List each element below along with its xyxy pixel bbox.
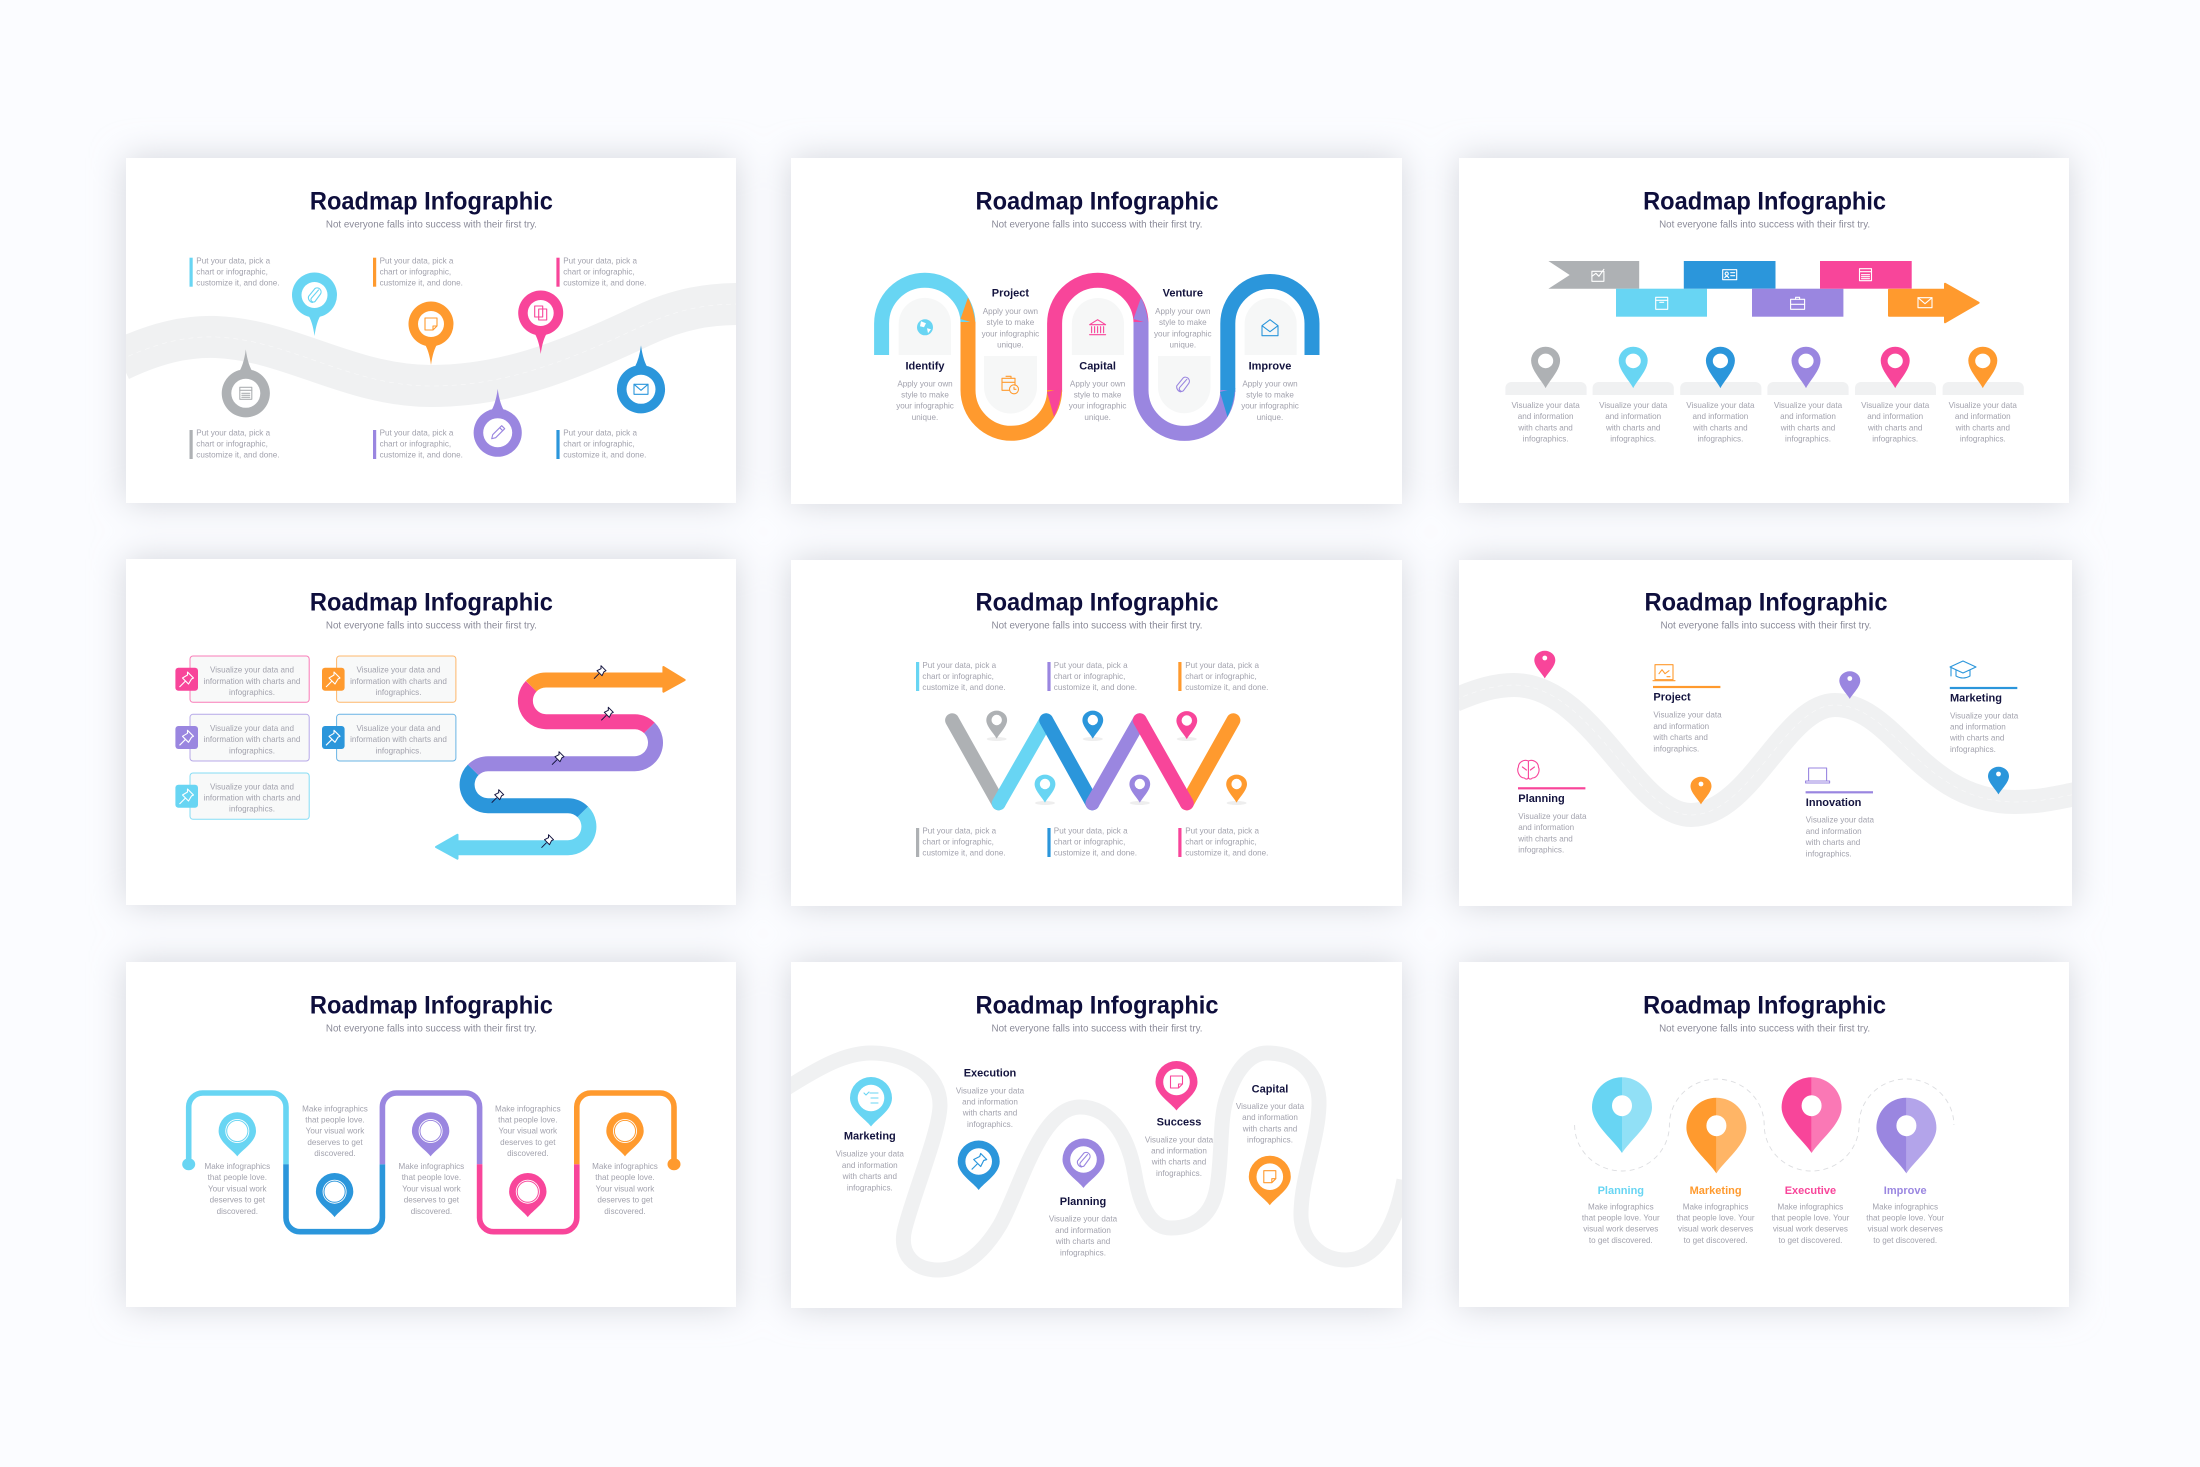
- card: cyan: Visualize your data and: [210, 782, 294, 791]
- text block: chart or infographic,: [922, 672, 994, 681]
- step: Identify: unique.: [912, 413, 938, 422]
- card: purple: information with charts and: [204, 735, 300, 744]
- card: blue: infographics.: [376, 746, 421, 755]
- title: Roadmap Infographic: [1643, 187, 1886, 215]
- item: Improve: [1866, 1185, 1944, 1245]
- card: pink: infographics.: [229, 688, 275, 697]
- step: Capital: style to make: [1074, 390, 1122, 400]
- step: Execution: Execution: [964, 1067, 1017, 1079]
- text block: chart or infographic,: [1185, 672, 1257, 681]
- text block: Put your data, pick a: [1054, 826, 1128, 835]
- step: Identify: Apply your own: [897, 379, 953, 388]
- wave text: Your visual work: [208, 1184, 268, 1193]
- panel: zigzag W: [791, 560, 1402, 906]
- panel: winding road with milestones: [1455, 560, 2076, 906]
- item: Executive: Executive: [1785, 1185, 1836, 1197]
- step: Improve: [1241, 360, 1299, 422]
- subtitle: Not everyone falls into success with their first try.: [326, 620, 537, 631]
- panel: S-curve arrow with cards: [126, 559, 736, 905]
- pin: note: [408, 302, 454, 365]
- step: Execution: infographics.: [967, 1120, 1013, 1129]
- text block: customize it, and done.: [380, 278, 463, 288]
- item: Marketing: that people love. Your: [1677, 1214, 1755, 1222]
- step: Marketing: Marketing: [844, 1131, 896, 1143]
- milestone: Planning: with charts and: [1517, 834, 1573, 843]
- title: Roadmap Infographic: [976, 991, 1219, 1019]
- step: Capital: [1069, 360, 1126, 422]
- title: Roadmap Infographic: [1643, 991, 1886, 1019]
- card text: Visualize your data: [1774, 401, 1843, 410]
- milestone: Planning: and information: [1518, 823, 1574, 832]
- wave text: deserves to get: [500, 1138, 556, 1147]
- step: Marketing: infographics.: [847, 1183, 893, 1192]
- subtitle: Not everyone falls into success with their first try.: [1659, 219, 1870, 230]
- road pins: [1534, 651, 2009, 804]
- step: Identify: style to make: [901, 390, 949, 400]
- road: [1455, 685, 2076, 815]
- milestone: Innovation: infographics.: [1806, 849, 1852, 858]
- text block: [1047, 661, 1137, 692]
- milestone: Planning: infographics.: [1518, 846, 1564, 855]
- step: Capital: Visualize your data: [1236, 1102, 1305, 1111]
- step: Success: and information: [1151, 1146, 1207, 1156]
- step: Project: unique.: [997, 341, 1024, 350]
- item: Improve: visual work deserves: [1868, 1225, 1943, 1234]
- card: orange: [322, 656, 456, 702]
- text block: chart or infographic,: [1054, 672, 1125, 681]
- pin: Planning: [1062, 1138, 1104, 1188]
- text block: [1178, 661, 1268, 692]
- wave text: Make infographics: [302, 1104, 368, 1113]
- zigzag: [952, 720, 1233, 803]
- title: Roadmap Infographic: [310, 588, 553, 616]
- step: Marketing: and information: [842, 1161, 898, 1170]
- item: Improve: that people love. Your: [1866, 1214, 1944, 1222]
- step: Capital: infographics.: [1247, 1136, 1293, 1145]
- wave text: Your visual work: [498, 1127, 558, 1136]
- card text: Visualize your data: [1949, 401, 2017, 410]
- step: Venture: your infographic: [1154, 329, 1212, 338]
- item: Marketing: [1677, 1185, 1755, 1245]
- text block: chart or infographic,: [380, 267, 451, 276]
- step: Success: [1145, 1116, 1214, 1178]
- card: orange: information with charts and: [350, 677, 447, 686]
- wave text: that people love.: [498, 1116, 558, 1124]
- step: Venture: Venture: [1163, 288, 1203, 300]
- step: Success: Visualize your data: [1145, 1135, 1214, 1144]
- pin: paperclip: [292, 272, 337, 336]
- serpentine path: [882, 280, 1312, 433]
- card text: infographics.: [1610, 435, 1656, 444]
- card headers: [1505, 382, 2024, 395]
- text block: Put your data, pick a: [1185, 661, 1259, 670]
- card text: with charts and: [1955, 423, 2010, 432]
- pin: pen: [474, 389, 522, 457]
- card text: with charts and: [1605, 423, 1660, 432]
- pins: [219, 1112, 644, 1217]
- item: Executive: visual work deserves: [1773, 1225, 1848, 1234]
- card text: Visualize your data: [1861, 401, 1930, 410]
- wave text: discovered.: [217, 1207, 258, 1216]
- item: Planning: visual work deserves: [1583, 1225, 1658, 1234]
- step: Planning: with charts and: [1055, 1237, 1110, 1246]
- step: Success: infographics.: [1156, 1169, 1202, 1178]
- item: Planning: that people love. Your: [1582, 1214, 1660, 1222]
- item: Executive: [1771, 1185, 1850, 1245]
- step: Marketing: [836, 1131, 904, 1192]
- icon: paperclip: [1177, 377, 1189, 392]
- step: Capital: Capital: [1079, 360, 1116, 372]
- item: Marketing: visual work deserves: [1678, 1225, 1753, 1234]
- wave text: discovered.: [507, 1149, 548, 1158]
- wave text: that people love.: [305, 1116, 365, 1124]
- icon: open envelope: [1262, 320, 1278, 336]
- wave text: discovered.: [411, 1207, 452, 1216]
- step: Planning: infographics.: [1060, 1248, 1106, 1257]
- card text: infographics.: [1697, 435, 1743, 444]
- item: Executive: to get discovered.: [1778, 1236, 1842, 1245]
- step: Project: Apply your own: [983, 307, 1038, 316]
- S-curve arrow: [436, 667, 685, 859]
- item: Executive: Make infographics: [1778, 1202, 1843, 1211]
- milestone: Project: [1652, 665, 1722, 753]
- card text: infographics.: [1960, 435, 2006, 444]
- item: Marketing: Marketing: [1690, 1185, 1742, 1197]
- step: Success: Success: [1157, 1116, 1201, 1128]
- card: blue: [322, 714, 456, 761]
- card text: infographics.: [1523, 435, 1569, 444]
- text block: chart or infographic,: [922, 837, 994, 846]
- wave text: Make infographics: [592, 1162, 658, 1171]
- step: Planning: Visualize your data: [1049, 1215, 1118, 1224]
- wave text: that people love.: [402, 1173, 461, 1182]
- text block: chart or infographic,: [563, 267, 635, 276]
- card: pink: information with charts and: [204, 677, 300, 686]
- card text: and information: [1867, 412, 1923, 421]
- pin: Success: [1156, 1061, 1198, 1111]
- wave text: discovered.: [604, 1207, 646, 1216]
- step: Project: your infographic: [982, 329, 1039, 338]
- milestone: Project: Visualize your data: [1653, 711, 1722, 720]
- milestone: Marketing: with charts and: [1949, 734, 2004, 743]
- panel: square wave: [126, 962, 736, 1307]
- text block: Put your data, pick a: [922, 826, 997, 835]
- wave text: Your visual work: [306, 1127, 365, 1136]
- card text: with charts and: [1780, 423, 1835, 432]
- step: Project: style to make: [987, 318, 1035, 327]
- pin: Marketing: [850, 1077, 892, 1127]
- panel: split pins: [1459, 962, 2069, 1307]
- step: Improve: style to make: [1246, 390, 1294, 400]
- item: Executive: that people love. Your: [1771, 1214, 1850, 1222]
- subtitle: Not everyone falls into success with their first try.: [992, 620, 1202, 631]
- text block: customize it, and done.: [922, 848, 1006, 858]
- card: purple: [175, 714, 309, 761]
- subtitle: Not everyone falls into success with their first try.: [992, 219, 1202, 230]
- pin: copy: [518, 290, 563, 354]
- pin: calendar: [222, 349, 270, 417]
- milestone: Project: infographics.: [1653, 744, 1699, 753]
- card text: and information: [1518, 412, 1573, 421]
- item: Marketing: Make infographics: [1683, 1202, 1748, 1211]
- step: Planning: [1049, 1196, 1118, 1257]
- subtitle: Not everyone falls into success with their first try.: [1660, 620, 1872, 631]
- step: Venture: [1154, 288, 1212, 350]
- road: [120, 304, 740, 386]
- text block: customize it, and done.: [922, 683, 1006, 692]
- pin: mail: [617, 345, 665, 413]
- subtitle: Not everyone falls into success with their first try.: [1659, 1023, 1870, 1034]
- pin: pink: [1782, 1077, 1842, 1153]
- card text: and information: [1605, 412, 1661, 421]
- icon: bank: [1090, 320, 1106, 335]
- text block: customize it, and done.: [1185, 683, 1268, 692]
- text block: [190, 428, 280, 460]
- card text: and information: [1693, 412, 1748, 421]
- ribbon icons: [1592, 269, 1932, 309]
- step: Improve: Apply your own: [1242, 379, 1298, 388]
- milestone: Marketing: and information: [1950, 722, 2006, 732]
- wave text: discovered.: [314, 1149, 356, 1158]
- step: Marketing: with charts and: [842, 1172, 897, 1181]
- step: Capital: with charts and: [1242, 1124, 1297, 1133]
- text block: chart or infographic,: [563, 440, 635, 449]
- text block: Put your data, pick a: [196, 428, 271, 438]
- wave text: Make infographics: [204, 1162, 270, 1171]
- subtitle: Not everyone falls into success with their first try.: [326, 219, 537, 230]
- text block: chart or infographic,: [196, 440, 268, 449]
- milestone: Project: and information: [1653, 722, 1709, 731]
- wave text: deserves to get: [597, 1196, 653, 1205]
- inner tiles: [899, 298, 1297, 414]
- wave text: Your visual work: [402, 1184, 462, 1193]
- card: cyan: information with charts and: [204, 794, 300, 802]
- title: Roadmap Infographic: [310, 991, 553, 1019]
- step: Capital: Capital: [1252, 1083, 1288, 1095]
- push pins: [492, 666, 613, 848]
- milestone: Innovation: with charts and: [1805, 838, 1860, 847]
- milestone: Innovation: and information: [1806, 827, 1862, 836]
- milestone: Planning: [1517, 760, 1587, 855]
- text block: Put your data, pick a: [1054, 661, 1128, 670]
- card text: with charts and: [1692, 423, 1748, 432]
- card text: Visualize your data: [1511, 401, 1580, 410]
- card: blue: Visualize your data and: [356, 724, 440, 733]
- text block: [1178, 826, 1268, 858]
- step: Marketing: Visualize your data: [836, 1150, 904, 1159]
- wave text: Your visual work: [596, 1184, 655, 1193]
- item: Planning: Make infographics: [1588, 1202, 1654, 1211]
- pin: cyan: [1592, 1077, 1652, 1153]
- milestone: Project: with charts and: [1652, 733, 1708, 742]
- title: Roadmap Infographic: [310, 187, 553, 215]
- milestone: Marketing: infographics.: [1950, 745, 1996, 754]
- card: pink: [175, 656, 309, 702]
- card text: Visualize your data: [1686, 401, 1755, 410]
- text block: customize it, and done.: [1185, 848, 1268, 858]
- card text: and information: [1780, 412, 1836, 421]
- step: Execution: and information: [962, 1098, 1018, 1106]
- card text: Visualize your data: [1599, 401, 1668, 410]
- step: Venture: unique.: [1170, 341, 1196, 350]
- wave text: that people love.: [595, 1173, 655, 1182]
- step: Capital: and information: [1242, 1113, 1298, 1122]
- text block: Put your data, pick a: [1185, 826, 1259, 835]
- soft shadows: [126, 158, 2072, 1308]
- text block: customize it, and done.: [563, 278, 646, 288]
- step: Execution: with charts and: [962, 1109, 1017, 1118]
- text block: [556, 428, 646, 460]
- panel: serpentine arcs: [791, 158, 1402, 504]
- title: Roadmap Infographic: [1644, 588, 1888, 616]
- step: Identify: [896, 360, 954, 422]
- step: Project: Project: [992, 288, 1029, 300]
- text block: Put your data, pick a: [563, 256, 637, 265]
- panel: ribbon arrow: [1459, 158, 2069, 503]
- text block: customize it, and done.: [563, 451, 646, 460]
- milestone: Planning: Visualize your data: [1518, 812, 1587, 821]
- text block: [190, 256, 280, 288]
- card: purple: Visualize your data and: [210, 724, 294, 733]
- text block: customize it, and done.: [196, 278, 280, 288]
- panel: road with balloon pins: [120, 158, 740, 503]
- item: Planning: [1582, 1185, 1660, 1245]
- card text: with charts and: [1517, 423, 1573, 432]
- icon: schedule: [1002, 376, 1018, 394]
- text block: Put your data, pick a: [922, 661, 997, 670]
- square wave line: [182, 1093, 680, 1232]
- item: Improve: to get discovered.: [1873, 1236, 1937, 1245]
- text block: Put your data, pick a: [563, 428, 637, 438]
- wave text: deserves to get: [307, 1138, 363, 1147]
- text block: [373, 428, 463, 460]
- item: Improve: Make infographics: [1872, 1202, 1938, 1211]
- milestone: Planning: Planning: [1518, 793, 1565, 805]
- text block: customize it, and done.: [380, 451, 463, 460]
- card: cyan: infographics.: [229, 805, 275, 814]
- milestone: Marketing: [1949, 661, 2019, 754]
- text block: Put your data, pick a: [196, 256, 271, 265]
- card: orange: infographics.: [376, 688, 421, 697]
- step: Venture: Apply your own: [1155, 307, 1210, 316]
- card text: and information: [1955, 412, 2011, 421]
- item: Improve: Improve: [1884, 1185, 1927, 1197]
- text block: customize it, and done.: [1054, 683, 1137, 692]
- wave text: Make infographics: [495, 1104, 561, 1113]
- item: Marketing: to get discovered.: [1684, 1236, 1748, 1245]
- ribbon segments: [1548, 261, 1979, 322]
- text block: Put your data, pick a: [380, 256, 454, 265]
- text block: customize it, and done.: [196, 451, 280, 460]
- step: Capital: your infographic: [1069, 402, 1126, 411]
- panel: meandering road: [785, 962, 1404, 1308]
- pin: Execution: [958, 1140, 1000, 1190]
- text block: chart or infographic,: [380, 440, 451, 449]
- text block: customize it, and done.: [1054, 848, 1137, 858]
- step: Success: with charts and: [1151, 1158, 1206, 1167]
- text block: Put your data, pick a: [380, 428, 454, 438]
- title: Roadmap Infographic: [976, 588, 1219, 616]
- step: Capital: [1236, 1083, 1305, 1145]
- card text: with charts and: [1867, 423, 1922, 432]
- step: Execution: Visualize your data: [956, 1086, 1025, 1095]
- pin: purple: [1876, 1098, 1936, 1173]
- wave text: deserves to get: [404, 1196, 460, 1205]
- milestone: Innovation: [1805, 768, 1875, 858]
- road: [785, 1053, 1404, 1270]
- milestone: Marketing: Marketing: [1950, 693, 2002, 705]
- text block: [373, 256, 463, 288]
- subtitle: Not everyone falls into success with their first try.: [992, 1023, 1202, 1034]
- step: Improve: your infographic: [1241, 402, 1299, 411]
- milestone: Project: Project: [1653, 692, 1691, 704]
- text block: chart or infographic,: [1185, 837, 1257, 846]
- pins: [986, 711, 1247, 805]
- item: Planning: to get discovered.: [1589, 1236, 1653, 1245]
- pin: orange: [1686, 1098, 1746, 1173]
- title: Roadmap Infographic: [976, 187, 1219, 215]
- wave text: deserves to get: [210, 1196, 266, 1205]
- icon: globe: [917, 319, 933, 335]
- text block: chart or infographic,: [1054, 837, 1125, 846]
- step: Venture: style to make: [1159, 318, 1207, 327]
- step: Improve: Improve: [1249, 360, 1291, 372]
- milestone: Marketing: Visualize your data: [1950, 711, 2019, 720]
- milestone: Innovation: Innovation: [1806, 797, 1862, 809]
- subtitle: Not everyone falls into success with their first try.: [326, 1023, 537, 1034]
- map pins: [1531, 347, 1997, 388]
- wave text: that people love.: [208, 1173, 267, 1182]
- step: Execution: [956, 1067, 1025, 1129]
- text block: [556, 256, 646, 288]
- card: pink: Visualize your data and: [210, 666, 294, 675]
- dashed wave: [1575, 1079, 1954, 1171]
- step: Capital: Apply your own: [1070, 379, 1125, 388]
- step: Identify: your infographic: [896, 402, 954, 411]
- pin: Capital: [1249, 1156, 1291, 1205]
- step: Project: [982, 288, 1039, 350]
- card text: infographics.: [1872, 435, 1918, 444]
- card: cyan: [175, 773, 309, 819]
- card: orange: Visualize your data and: [356, 666, 440, 675]
- card: blue: information with charts and: [350, 735, 447, 744]
- step: Identify: Identify: [905, 360, 945, 372]
- step: Planning: Planning: [1060, 1196, 1106, 1208]
- card text: infographics.: [1785, 435, 1831, 444]
- wave text: Make infographics: [399, 1162, 464, 1171]
- card: purple: infographics.: [229, 746, 275, 755]
- text block: [1047, 826, 1137, 858]
- step: Improve: unique.: [1257, 413, 1283, 422]
- step: Capital: unique.: [1084, 413, 1111, 422]
- text block: [916, 826, 1006, 858]
- text block: chart or infographic,: [196, 267, 268, 276]
- item: Planning: Planning: [1598, 1185, 1644, 1197]
- text block: [916, 661, 1006, 692]
- milestone: Innovation: Visualize your data: [1806, 816, 1875, 825]
- step: Planning: and information: [1055, 1226, 1111, 1235]
